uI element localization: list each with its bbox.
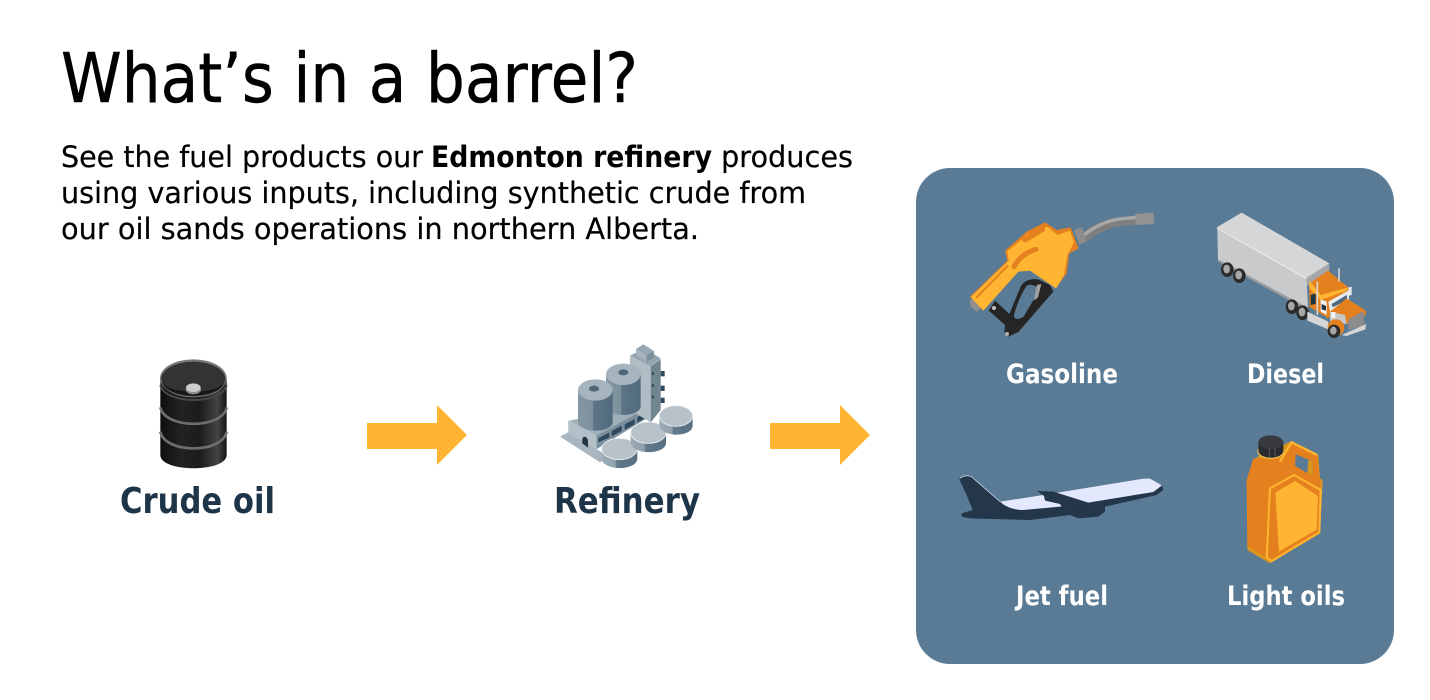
icon: gasoline pump nozzle xyxy=(969,213,1154,337)
rear tank xyxy=(606,374,641,415)
arrow: refinery to products xyxy=(770,405,870,465)
panel: fuel products xyxy=(916,168,1394,664)
intro text block xyxy=(61,140,853,246)
cab xyxy=(1309,271,1348,318)
icon: light oils jug xyxy=(1247,435,1323,563)
tower xyxy=(630,348,661,367)
label: jet fuel: Jet fuel xyxy=(1014,581,1108,612)
label: refinery: Refinery xyxy=(554,481,700,522)
label: diesel: Diesel xyxy=(1247,359,1324,390)
icon: crude oil barrel xyxy=(160,359,227,468)
intro text block: our oil sands operations in northern Alberta. xyxy=(61,212,699,246)
icon: diesel truck xyxy=(1217,213,1366,338)
intro text block: See the fuel products our xyxy=(61,140,424,174)
front tank xyxy=(578,390,613,431)
intro text block: produces xyxy=(721,140,853,174)
label: light oils: Light oils xyxy=(1227,581,1345,612)
icon: refinery xyxy=(560,344,693,468)
intro text block: using various inputs, including synthetic crude from xyxy=(61,176,806,210)
platform xyxy=(560,432,608,462)
icon: jet fuel airplane xyxy=(959,476,1163,520)
small tanks xyxy=(602,438,637,468)
arrow: crude oil to refinery xyxy=(367,405,467,465)
label: crude oil: Crude oil xyxy=(120,481,275,522)
title: What’s in a barrel? xyxy=(61,39,638,119)
intro text block: Edmonton refinery xyxy=(431,140,712,174)
panel background xyxy=(916,168,1394,664)
label: gasoline: Gasoline xyxy=(1006,359,1118,390)
